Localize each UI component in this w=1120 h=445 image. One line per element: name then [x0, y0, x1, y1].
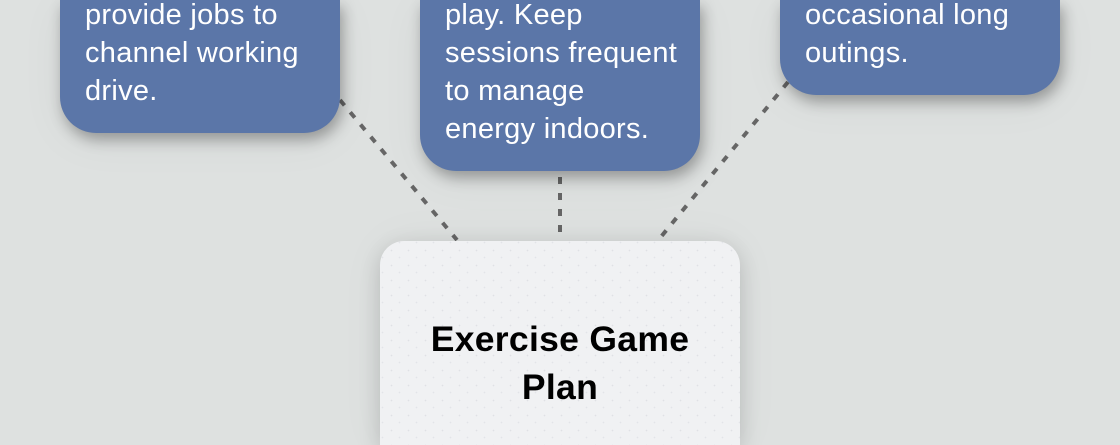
panel: middle card: to manage: [445, 75, 585, 107]
panel: left card: [60, 0, 340, 133]
panel: left card: channel working: [85, 37, 299, 69]
panel: right card: [780, 0, 1060, 95]
panel: left card: drive.: [85, 75, 158, 107]
panel: middle card: [420, 0, 700, 171]
panel: center title card: [380, 241, 740, 445]
panel: right card: outings.: [805, 37, 909, 69]
title: Plan: [522, 367, 598, 407]
title: Exercise Game: [431, 319, 689, 359]
panel: middle card: sessions frequent: [445, 37, 677, 69]
panel: middle card: energy indoors.: [445, 113, 649, 145]
title: [431, 319, 689, 407]
